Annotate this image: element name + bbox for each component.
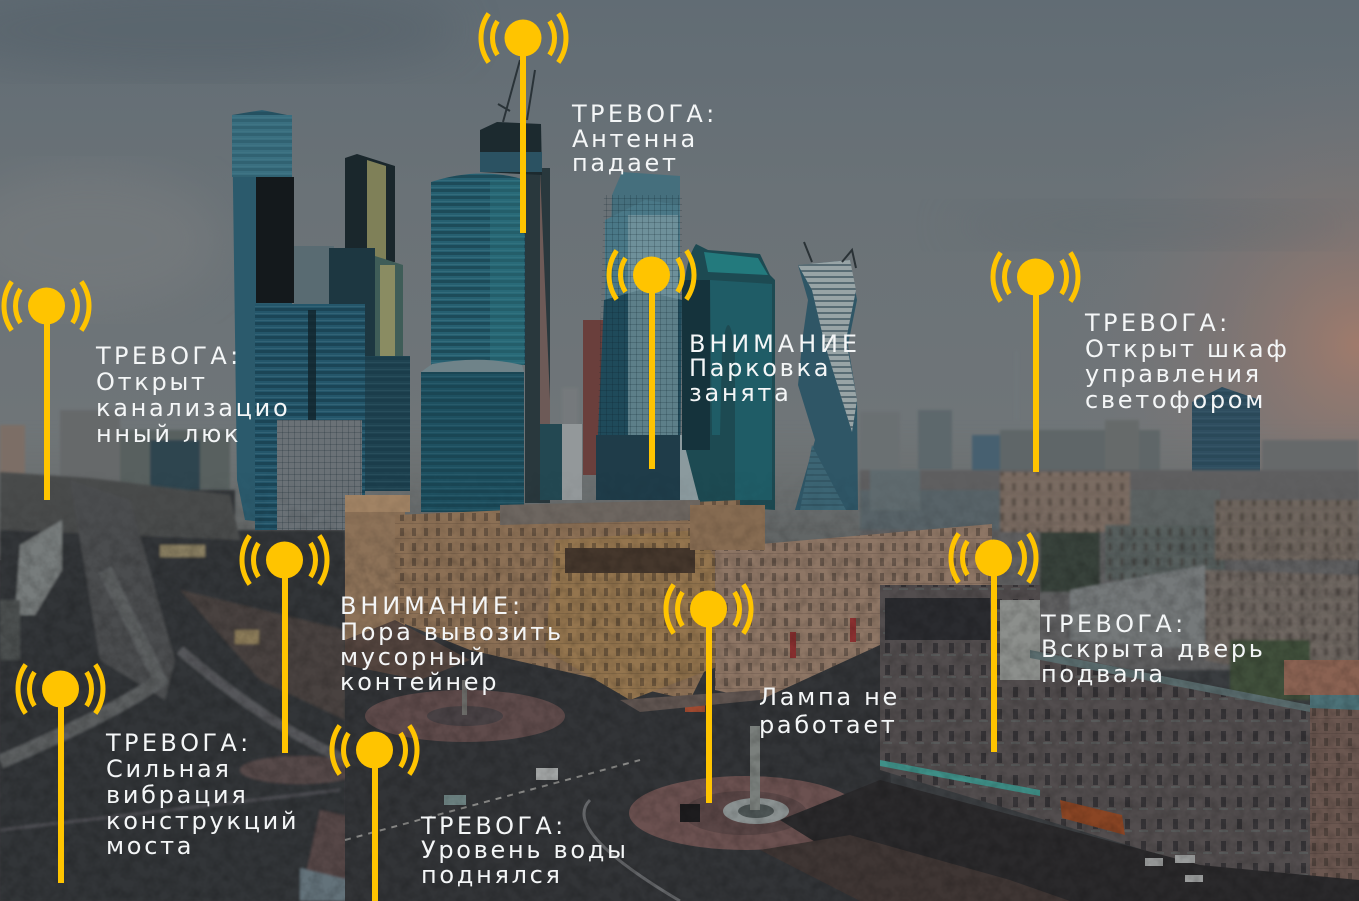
label: bridge vibration alarm: Сильная (106, 755, 232, 783)
label: garbage notice: ВНИМАНИЕ: (340, 592, 524, 620)
label: street lamp: работает (759, 711, 897, 739)
label: parking notice: ВНИМАНИЕ (689, 330, 861, 358)
twisted tower (795, 242, 858, 510)
far city blocks right (860, 470, 1359, 700)
label: antenna alarm: Антенна (572, 125, 698, 153)
label: parking notice: занята (689, 379, 792, 407)
label: water level alarm: поднялся (421, 861, 563, 889)
label: antenna alarm: падает (572, 149, 679, 177)
label: traffic light cabinet alarm: управления (1085, 360, 1262, 388)
pin: parking (609, 251, 694, 469)
label: bridge vibration alarm: вибрация (106, 781, 248, 809)
label: street lamp: Лампа не (759, 683, 900, 711)
pin: garbage container (242, 536, 327, 753)
label: garbage notice: контейнер (340, 668, 499, 696)
tan stalinist buildings (345, 495, 992, 712)
pin: manhole (4, 282, 89, 500)
lower right street (760, 780, 1359, 901)
distant skyline (0, 350, 1359, 560)
label: basement door alarm: Вскрыта дверь (1041, 635, 1266, 663)
skyscraper cluster (232, 60, 858, 530)
pin: bridge vibration (18, 665, 103, 883)
city texture (0, 470, 1359, 901)
label: traffic light cabinet alarm: светофором (1085, 386, 1266, 414)
label: basement door alarm: ТРЕВОГА: (1040, 610, 1187, 638)
pin: traffic light cabinet (993, 253, 1078, 472)
pin: street lamp (666, 585, 751, 803)
label: garbage notice: мусорный (340, 643, 487, 671)
label: traffic light cabinet alarm: Открыт шкаф (1085, 335, 1290, 363)
pin: water level (332, 726, 417, 901)
label: garbage notice: Пора вывозить (340, 618, 564, 646)
label: antenna alarm: ТРЕВОГА: (571, 100, 718, 128)
pin: basement door (951, 534, 1036, 752)
label: traffic light cabinet alarm: ТРЕВОГА: (1084, 309, 1231, 337)
far tower right (1192, 387, 1260, 496)
label: manhole alarm: нный люк (96, 420, 241, 448)
central road junction (345, 640, 900, 901)
label: bridge vibration alarm: моста (106, 832, 194, 860)
label: manhole alarm: Открыт (96, 368, 208, 396)
label: manhole alarm: канализацио (96, 394, 290, 422)
dark apartment block right (880, 585, 1359, 885)
left highways (0, 472, 520, 901)
label: basement door alarm: подвала (1041, 660, 1166, 688)
label: water level alarm: ТРЕВОГА: (420, 812, 567, 840)
label: bridge vibration alarm: ТРЕВОГА: (105, 729, 252, 757)
label: water level alarm: Уровень воды (421, 836, 629, 864)
label: parking notice: Парковка (689, 354, 831, 382)
label: bridge vibration alarm: конструкций (106, 807, 299, 835)
label: manhole alarm: ТРЕВОГА: (95, 342, 242, 370)
pin: antenna (481, 14, 566, 233)
sky (0, 0, 1359, 560)
